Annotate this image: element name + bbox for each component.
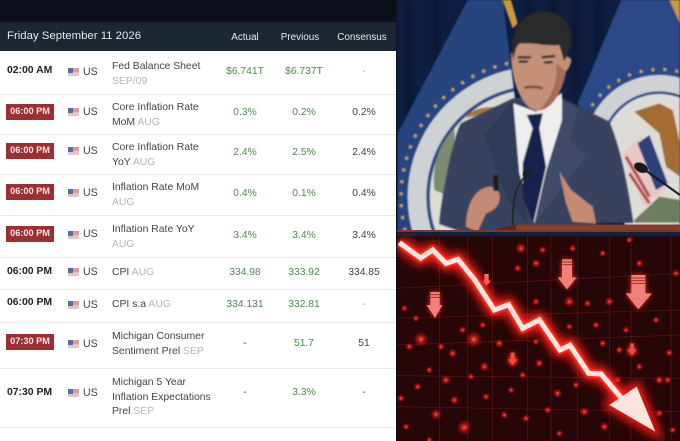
hands <box>466 187 500 232</box>
row: Fed Balance Sheet: $6.741T <box>226 66 264 77</box>
suit <box>439 98 633 233</box>
row: Michigan 5 Year Inflation Expectations Prel: - <box>243 387 247 398</box>
small down arrows <box>427 259 652 365</box>
row: Core Inflation Rate YoY: 06:00 PM <box>10 145 50 155</box>
row: CPI s.a: 334.131 <box>226 299 264 310</box>
row: CPI: 06:00 PM <box>7 266 52 277</box>
icon: down arrow 1 <box>427 292 442 318</box>
row: Core Inflation Rate MoM: MoM AUG <box>112 117 160 128</box>
icon: down arrow 3 <box>626 275 652 309</box>
chart image: red falling market arrow <box>397 230 680 441</box>
row: Inflation Rate MoM: Inflation Rate MoM <box>112 182 199 193</box>
column header: actual: Actual <box>231 32 259 43</box>
row: Michigan 5 Year Inflation Expectations Prel: US <box>83 387 98 399</box>
row: Inflation Rate YoY: Inflation Rate YoY <box>112 224 195 235</box>
arrow head glow <box>609 387 655 432</box>
row: Michigan 5 Year Inflation Expectations Prel: Prel SEP <box>112 406 154 417</box>
icon: down arrow 2 <box>558 259 577 289</box>
row: CPI: US <box>83 266 98 278</box>
head <box>511 43 571 111</box>
falling jagged line wide glow <box>399 243 626 403</box>
table header <box>0 22 397 51</box>
row: Inflation Rate YoY: 3.4% <box>352 230 376 241</box>
microphones <box>513 175 527 225</box>
flag right <box>578 0 680 236</box>
heading: date: Friday September 11 2026 <box>7 30 141 42</box>
row: Michigan Consumer Sentiment Prel <box>6 331 370 357</box>
row: Core Inflation Rate MoM: 0.2% <box>292 107 316 118</box>
arrow glow <box>427 259 652 365</box>
arrow head <box>609 387 655 432</box>
row: Michigan Consumer Sentiment Prel: US <box>83 338 98 350</box>
row: CPI s.a: US <box>83 299 98 311</box>
row: Michigan 5 Year Inflation Expectations Prel <box>7 377 366 417</box>
row: Inflation Rate YoY: AUG <box>112 239 135 250</box>
row: Inflation Rate MoM: 06:00 PM <box>10 186 50 196</box>
row: Fed Balance Sheet: $6.737T <box>285 66 323 77</box>
particle field <box>397 236 680 441</box>
row: Fed Balance Sheet: - <box>362 66 366 77</box>
row: CPI: CPI AUG <box>112 267 154 278</box>
row: CPI s.a <box>7 297 366 311</box>
row: Inflation Rate MoM: AUG <box>112 197 135 208</box>
podium <box>398 225 680 236</box>
row: Core Inflation Rate MoM: Core Inflation Rate <box>112 102 199 113</box>
icon: down arrow 6 <box>627 343 637 355</box>
row: Core Inflation Rate YoY: Core Inflation Rate <box>112 142 199 153</box>
row: Michigan Consumer Sentiment Prel: Sentiment Prel SEP <box>112 346 204 357</box>
row: Michigan 5 Year Inflation Expectations Prel: 07:30 PM <box>7 387 52 398</box>
row: Inflation Rate MoM: 0.1% <box>292 188 316 199</box>
row: Inflation Rate MoM <box>6 182 376 208</box>
row: Core Inflation Rate YoY: 2.5% <box>292 147 316 158</box>
row: Michigan 5 Year Inflation Expectations Prel: Michigan 5 Year <box>112 377 186 388</box>
row: CPI: 333.92 <box>288 267 320 278</box>
row: Michigan Consumer Sentiment Prel: Michigan Consumer <box>112 331 204 342</box>
row: Inflation Rate MoM: 0.4% <box>352 188 376 199</box>
tie <box>523 113 546 223</box>
row: Fed Balance Sheet: SEP/09 <box>112 76 147 87</box>
icon: down arrow 5 <box>508 353 518 365</box>
column header: consensus: Consensus <box>337 32 387 43</box>
falling jagged line <box>399 243 626 403</box>
row: Michigan 5 Year Inflation Expectations Prel: 3.3% <box>292 387 316 398</box>
flag left <box>397 0 680 230</box>
row: CPI <box>7 266 380 278</box>
row: Michigan 5 Year Inflation Expectations Prel: Inflation Expectations <box>112 392 211 403</box>
row: Core Inflation Rate MoM <box>6 102 376 128</box>
shirt <box>513 93 562 223</box>
row: Michigan Consumer Sentiment Prel: 51.7 <box>294 338 314 349</box>
row: CPI: 334.98 <box>229 267 261 278</box>
falling jagged line tight glow <box>399 243 626 403</box>
seal right <box>590 66 680 225</box>
left edge divider of images <box>396 0 397 441</box>
photo: speaker at podium before Federal Reserve flags <box>397 0 680 356</box>
row: Fed Balance Sheet: Fed Balance Sheet <box>112 61 200 72</box>
row: Fed Balance Sheet: US <box>83 66 98 78</box>
row: Fed Balance Sheet <box>7 61 366 87</box>
row: CPI s.a: CPI s.a AUG <box>112 299 171 310</box>
column header: previous: Previous <box>281 32 319 43</box>
row: Inflation Rate YoY <box>6 224 376 250</box>
row: Core Inflation Rate MoM: 0.3% <box>233 107 257 118</box>
row: Inflation Rate YoY: 3.4% <box>292 230 316 241</box>
row: Core Inflation Rate YoY <box>6 142 376 168</box>
row: Core Inflation Rate MoM: 0.2% <box>352 107 376 118</box>
top dark band <box>0 0 397 22</box>
seal left <box>398 60 516 230</box>
row: Inflation Rate MoM: US <box>83 187 98 199</box>
row: Michigan Consumer Sentiment Prel: 51 <box>358 338 370 349</box>
row: Inflation Rate YoY: 06:00 PM <box>10 228 50 238</box>
icon: down arrow 4 <box>483 274 491 286</box>
row: Core Inflation Rate YoY: 2.4% <box>233 147 257 158</box>
row: CPI s.a: 332.81 <box>288 299 320 310</box>
row: CPI: 334.85 <box>348 267 380 278</box>
row: Michigan 5 Year Inflation Expectations Prel: - <box>362 387 366 398</box>
row: Michigan Consumer Sentiment Prel: - <box>243 338 247 349</box>
row: Michigan Consumer Sentiment Prel: 07:30 PM <box>10 336 50 346</box>
row: Core Inflation Rate YoY: YoY AUG <box>112 157 155 168</box>
row: Inflation Rate MoM: 0.4% <box>233 188 257 199</box>
row: CPI s.a: 06:00 PM <box>7 297 52 308</box>
speaker <box>439 11 633 233</box>
row: Core Inflation Rate MoM: 06:00 PM <box>10 106 50 116</box>
row: Core Inflation Rate YoY: US <box>83 145 98 157</box>
row: CPI s.a: - <box>362 299 366 310</box>
row: Inflation Rate YoY: 3.4% <box>233 230 257 241</box>
row: Core Inflation Rate MoM: US <box>83 106 98 118</box>
row: Fed Balance Sheet: 02:00 AM <box>7 65 52 76</box>
panel: economic calendar table <box>0 0 397 441</box>
row: Inflation Rate YoY: US <box>83 228 98 240</box>
row: Core Inflation Rate YoY: 2.4% <box>352 147 376 158</box>
